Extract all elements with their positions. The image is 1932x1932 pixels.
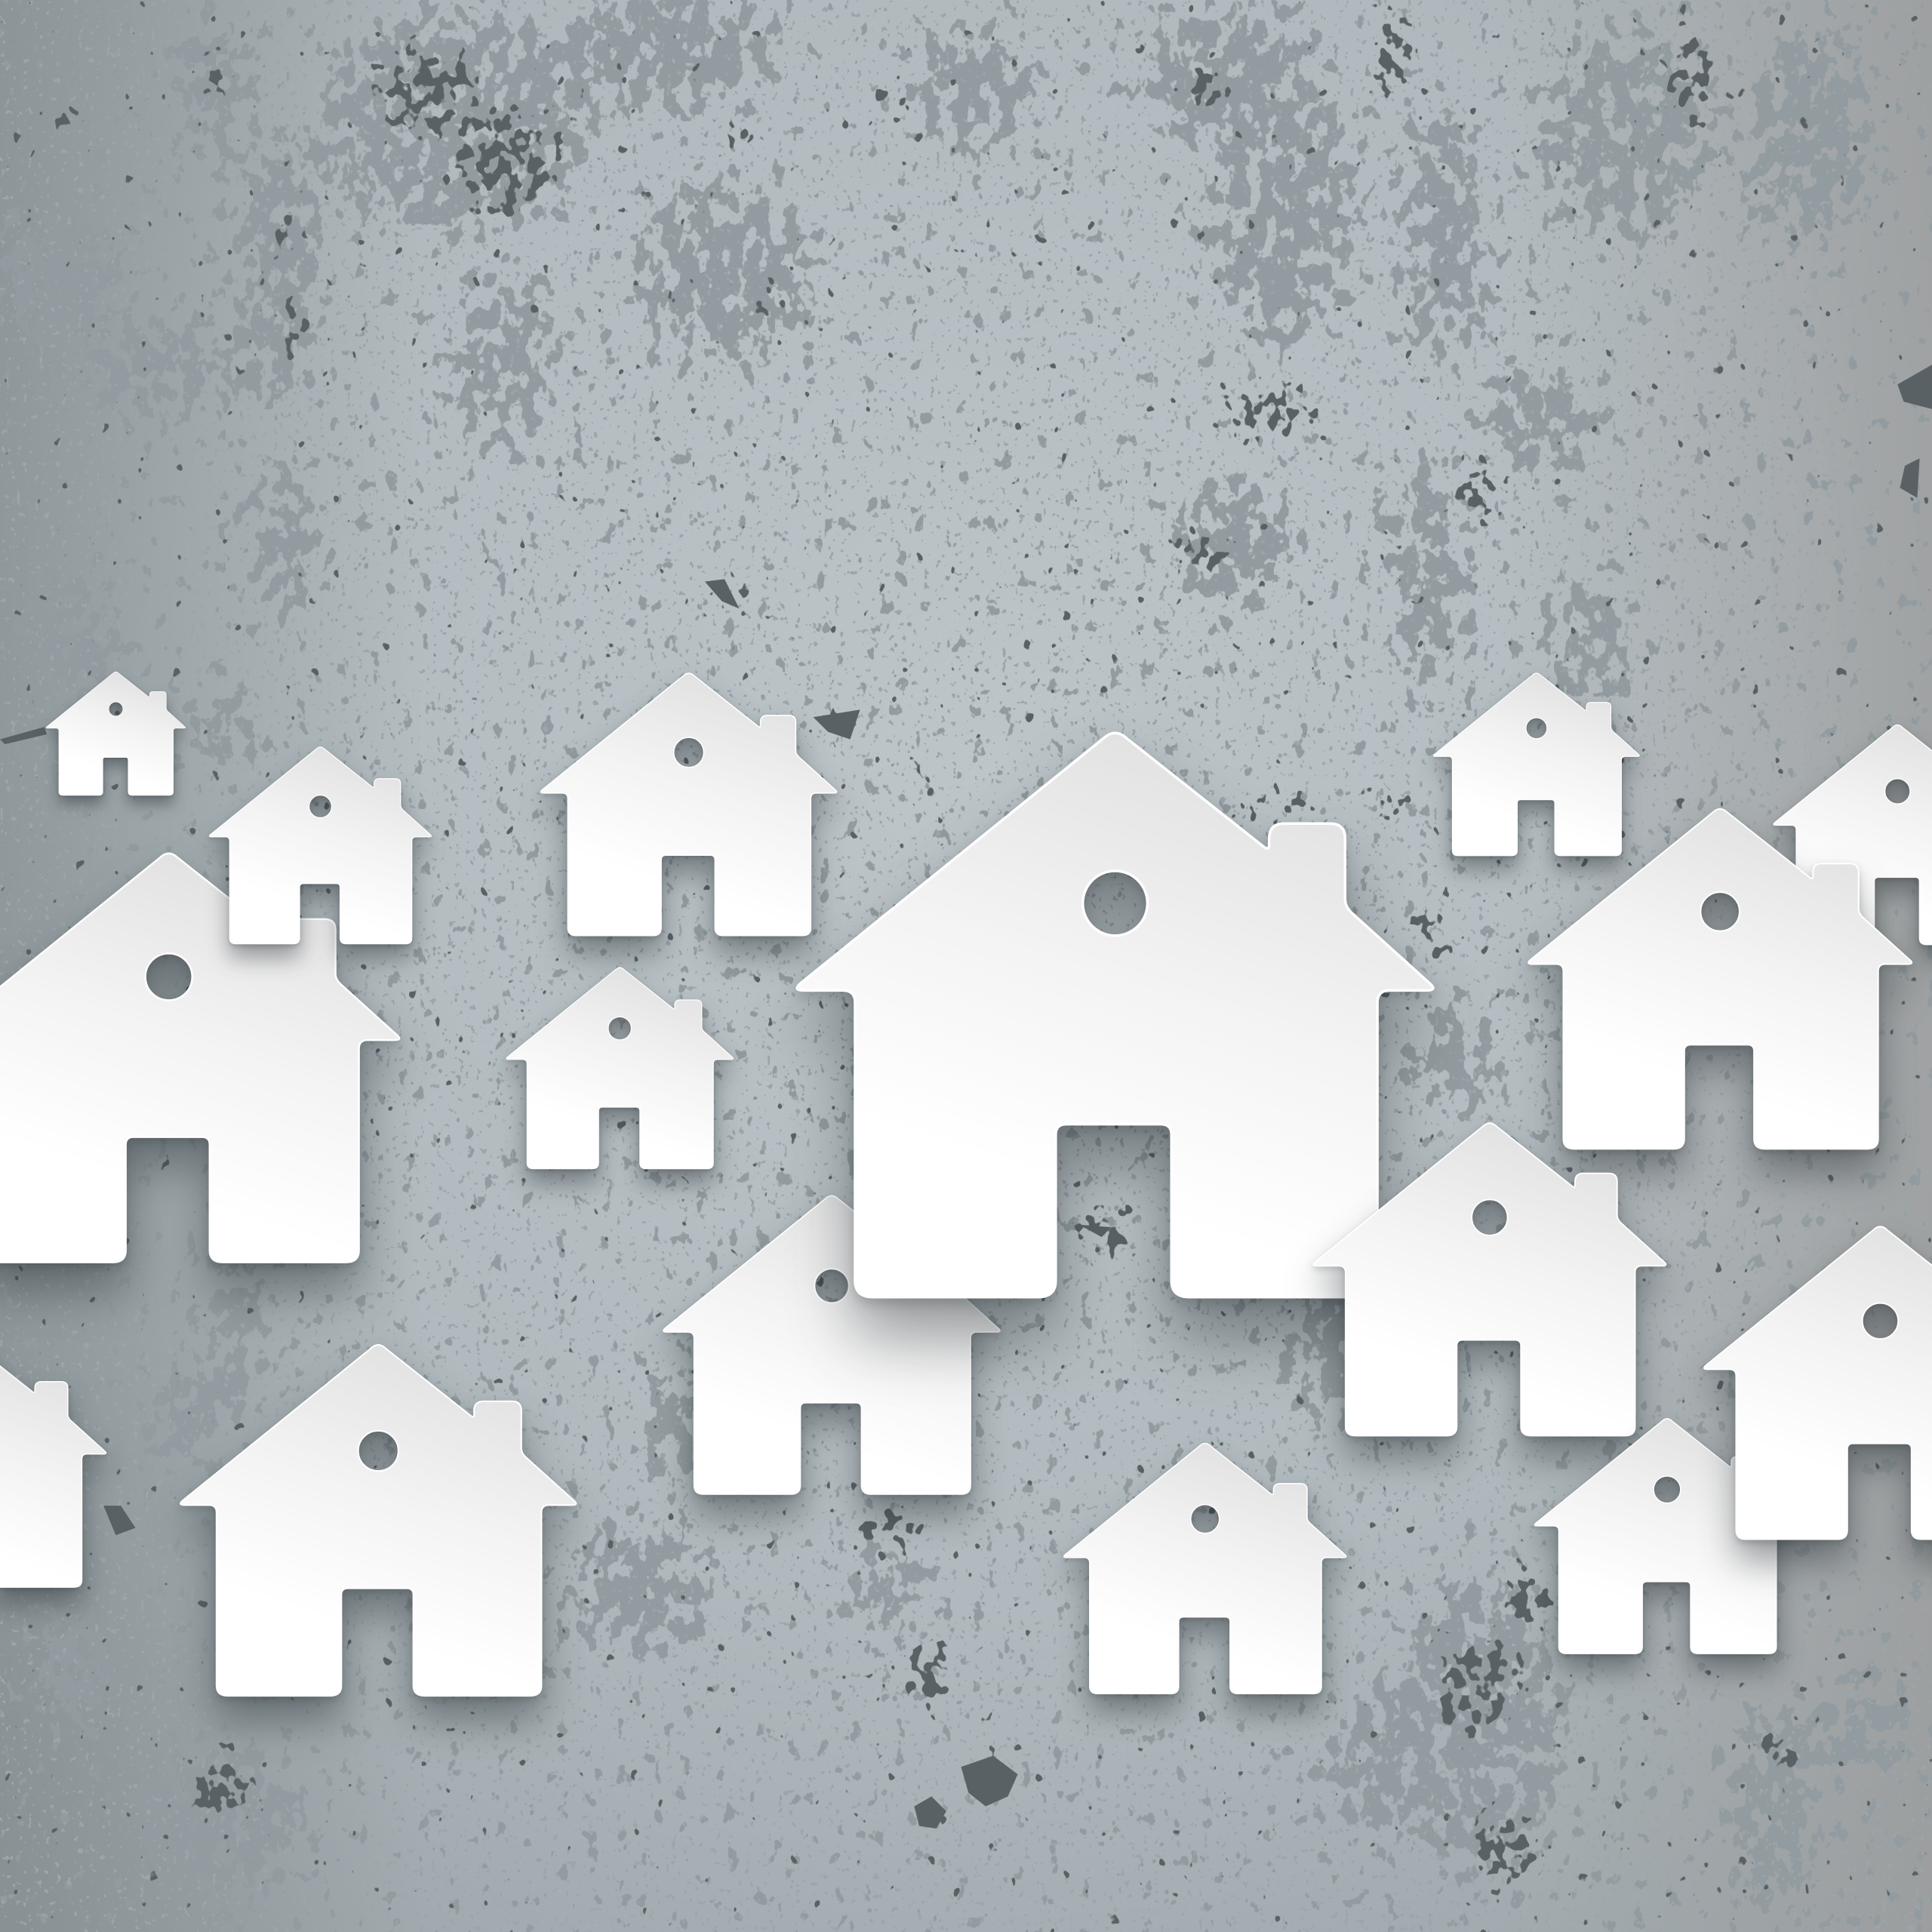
house: large right (1528, 809, 1912, 1149)
house: large left, cropped (0, 854, 399, 1263)
house: tiny top left (46, 672, 186, 795)
house: lower left edge, cropped (0, 1343, 106, 1587)
house: medium lower centre (1064, 1443, 1346, 1694)
house: medium behind the central house (663, 1195, 1000, 1494)
house: medium right edge, cropped (1704, 1226, 1932, 1540)
house: medium right of centre (1313, 1123, 1666, 1435)
house: small upper right (1434, 673, 1639, 856)
house: small centre-left (506, 968, 733, 1169)
house: small upper left (209, 747, 432, 944)
house: large lower left (180, 1345, 576, 1696)
house: right edge, cropped (1774, 725, 1932, 945)
house: medium upper centre-left (541, 673, 837, 936)
house: small lower right (1534, 1419, 1800, 1654)
house: large central (797, 733, 1433, 1297)
